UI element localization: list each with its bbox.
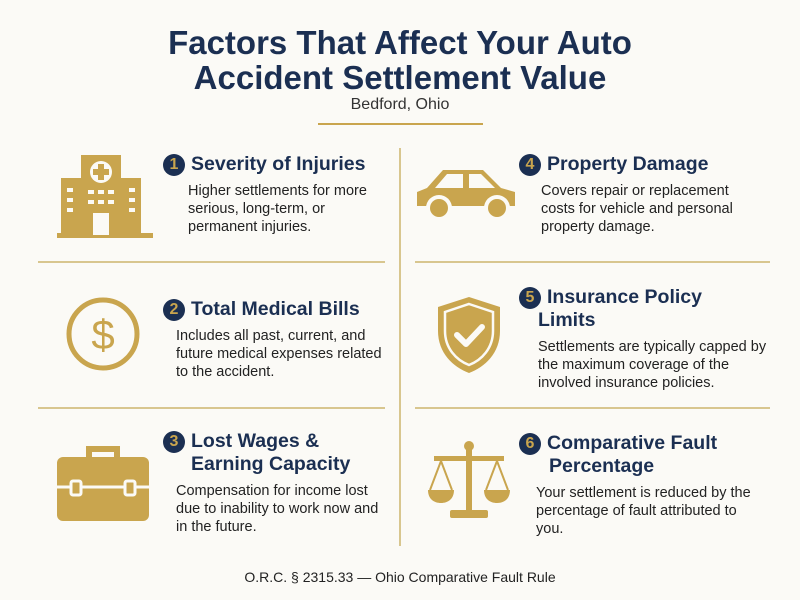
icon: scales: [428, 441, 510, 518]
section 6: you.: [536, 521, 563, 537]
section 6: Percentage: [549, 455, 654, 477]
icon: briefcase: [57, 446, 149, 521]
section 4: Covers repair or replacement: [541, 183, 729, 199]
section 2: 2: [170, 301, 178, 318]
section 4: [519, 153, 733, 235]
icon: dollar: [66, 298, 140, 370]
title: Factors That Affect Your Auto: [168, 24, 632, 61]
section 4: 4: [526, 156, 534, 173]
section 1: Severity of Injuries: [191, 153, 365, 175]
icon: car: [417, 170, 515, 217]
title: Accident Settlement Value: [194, 59, 606, 96]
section 1: Higher settlements for more: [188, 183, 367, 199]
section 4: costs for vehicle and personal: [541, 201, 733, 217]
section 6: [519, 432, 751, 537]
icon: hospital: [57, 155, 153, 238]
section 2: to the accident.: [176, 364, 274, 380]
section 3: due to inability to work now and: [176, 501, 378, 517]
icon: dollar: $: [91, 311, 115, 358]
subtitle: Bedford, Ohio: [351, 96, 449, 113]
section 4: property damage.: [541, 219, 655, 235]
section 3: Compensation for income lost: [176, 483, 368, 499]
section 1: [163, 153, 367, 235]
section 5: Settlements are typically capped by: [538, 339, 766, 355]
section 2: future medical expenses related: [176, 346, 382, 362]
section 5: [519, 286, 766, 391]
section 3: 3: [170, 433, 178, 450]
title: [168, 24, 632, 96]
section 5: involved insurance policies.: [538, 375, 715, 391]
section 5: Insurance Policy: [547, 286, 702, 308]
section 5: 5: [526, 289, 534, 306]
section 6: percentage of fault attributed to: [536, 503, 737, 519]
section 3: in the future.: [176, 519, 257, 535]
section 2: Total Medical Bills: [191, 298, 360, 320]
section 4: Property Damage: [547, 153, 708, 175]
section 6: 6: [526, 435, 534, 452]
section 1: permanent injuries.: [188, 219, 311, 235]
section 1: serious, long-term, or: [188, 201, 325, 217]
section 2: Includes all past, current, and: [176, 328, 365, 344]
footer: O.R.C. § 2315.33 — Ohio Comparative Fault Rule: [244, 569, 556, 585]
section 2: [163, 298, 382, 380]
section 1: 1: [170, 156, 178, 173]
section 3: Earning Capacity: [191, 453, 350, 475]
section 3: [163, 430, 378, 535]
section 3: Lost Wages &: [191, 430, 319, 452]
section 5: Limits: [538, 309, 595, 331]
section 6: Your settlement is reduced by the: [536, 485, 751, 501]
icon: shield: [438, 297, 500, 373]
section 5: the maximum coverage of the: [538, 357, 729, 373]
section 6: Comparative Fault: [547, 432, 717, 454]
